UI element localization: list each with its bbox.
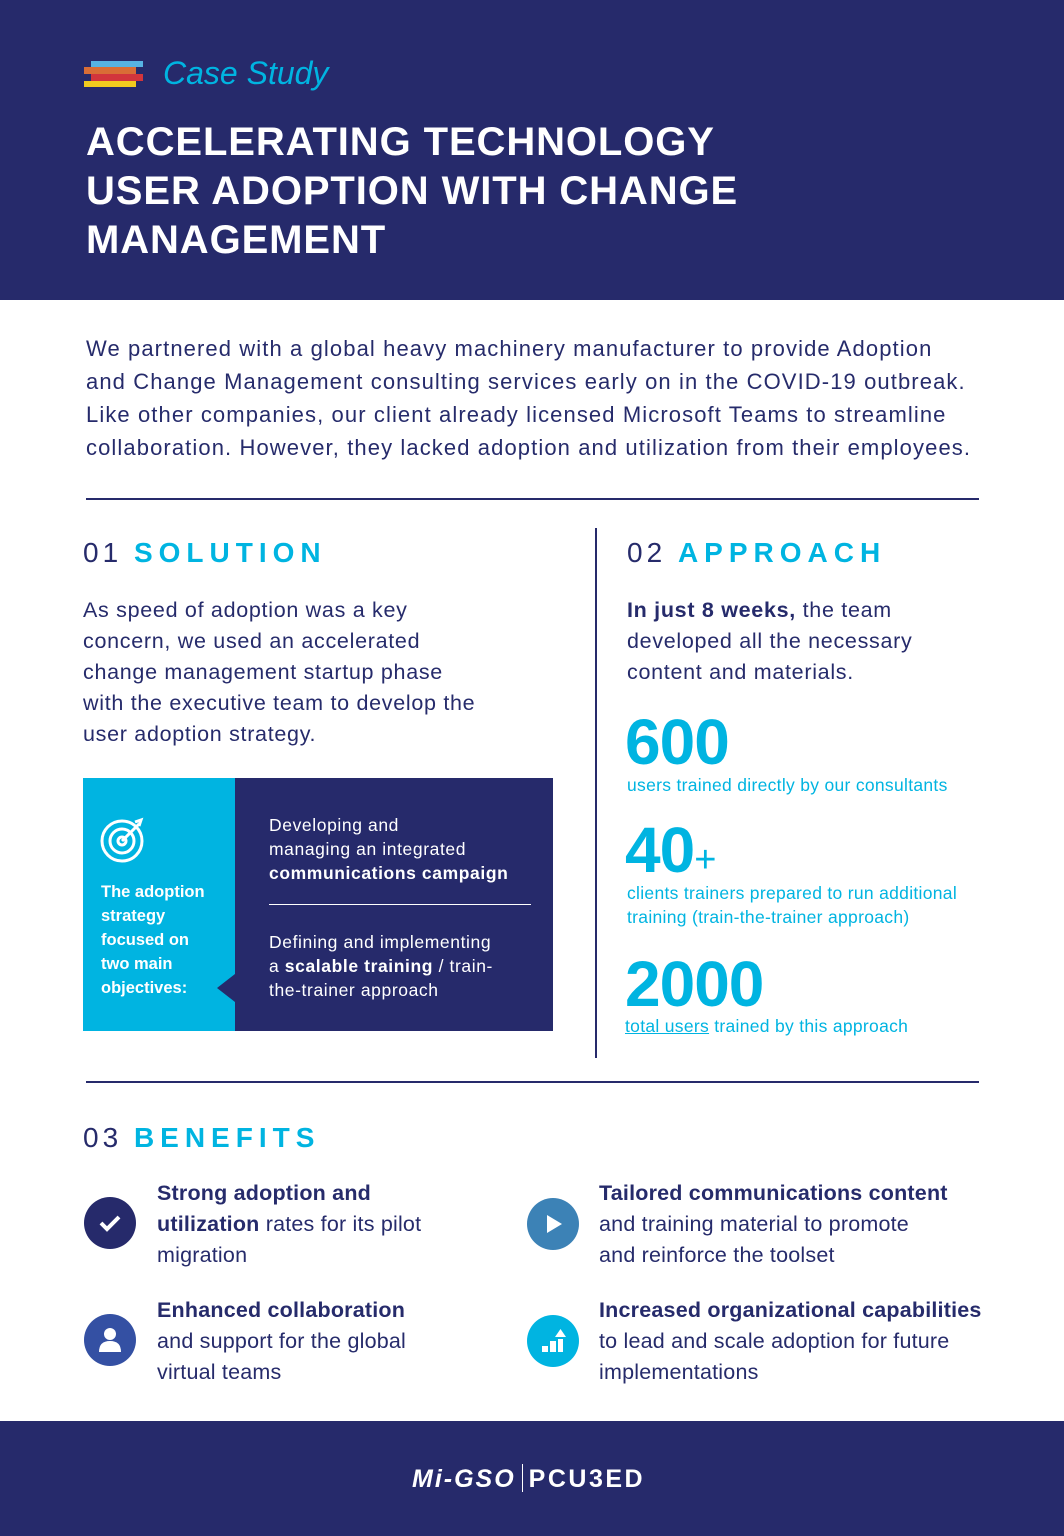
stat 40+: 40+ [625, 814, 715, 886]
intro text: and Change Management consulting services early on in the COVID-19 outbreak. [86, 369, 966, 394]
approach text: content and materials. [627, 660, 854, 684]
benefit: enhanced collaboration: and support for the global [157, 1329, 406, 1353]
intro text: collaboration. However, they lacked adoption and utilization from their employees. [86, 435, 971, 460]
benefit: strong adoption: utilization rates for its pilot [157, 1212, 421, 1236]
benefit: increased capabilities: to lead and scale adoption for future [599, 1329, 949, 1353]
benefit: tailored communications: and reinforce the toolset [599, 1243, 835, 1267]
navy panel: managing an integrated [269, 839, 466, 859]
stat 600 [625, 706, 948, 795]
benefit: enhanced collaboration: virtual teams [157, 1360, 281, 1384]
benefit: tailored communications [527, 1181, 948, 1267]
benefit: strong adoption: Strong adoption and [157, 1181, 371, 1205]
approach text: In just 8 weeks, the team [627, 598, 892, 622]
stat 2000: total users trained by this approach [625, 1016, 908, 1036]
heading: 02 approach: 02 APPROACH [627, 537, 886, 568]
benefit: increased capabilities: implementations [599, 1360, 759, 1384]
approach text: developed all the necessary [627, 629, 912, 653]
solution text: user adoption strategy. [83, 722, 316, 746]
title [86, 120, 738, 262]
benefit: enhanced collaboration [84, 1298, 406, 1384]
solution text: change management startup phase [83, 660, 443, 684]
heading: 01 solution: 01 SOLUTION [83, 537, 327, 568]
heading: 03 benefits: 03 BENEFITS [83, 1122, 320, 1153]
benefit: strong adoption: migration [157, 1243, 247, 1267]
navy panel: communications campaign [269, 863, 508, 883]
intro text: We partnered with a global heavy machinery manufacturer to provide Adoption [86, 336, 932, 361]
benefit: enhanced collaboration: Enhanced collaboration [157, 1298, 405, 1322]
solution text: As speed of adoption was a key [83, 598, 408, 622]
subtitle: case study: Case Study [163, 55, 328, 91]
intro text [86, 336, 971, 460]
cyan panel: The adoption [101, 883, 205, 901]
solution text [83, 598, 475, 746]
benefit: increased capabilities [527, 1298, 982, 1384]
title: MANAGEMENT [86, 218, 386, 262]
title: USER ADOPTION WITH CHANGE [86, 169, 738, 213]
stat 600: 600 [625, 706, 729, 778]
navy panel: a scalable training / train- [269, 956, 493, 976]
navy panel: Developing and [269, 815, 399, 835]
stat 2000: 2000 [625, 948, 763, 1020]
stat 40+: training (train-the-trainer approach) [627, 907, 909, 927]
icon: target [100, 818, 144, 862]
benefit: tailored communications: Tailored communications content [599, 1181, 948, 1205]
objectives box [83, 778, 553, 1031]
footer logo: Mi-GSO PCU3ED [412, 1465, 645, 1493]
benefit: strong adoption [84, 1181, 421, 1267]
benefit: increased capabilities: Increased organizational capabilities [599, 1298, 982, 1322]
cyan panel: focused on [101, 931, 189, 949]
solution text: with the executive team to develop the [83, 691, 475, 715]
stat 40+ [625, 814, 957, 927]
solution text: concern, we used an accelerated [83, 629, 420, 653]
navy panel: the-trainer approach [269, 980, 439, 1000]
stat 40+: clients trainers prepared to run additional [627, 883, 957, 903]
navy panel: Defining and implementing [269, 932, 491, 952]
navy panel [235, 778, 553, 1031]
cyan panel: objectives: [101, 979, 187, 997]
title: ACCELERATING TECHNOLOGY [86, 120, 715, 164]
cyan panel: two main [101, 955, 173, 973]
cyan panel: strategy [101, 907, 165, 925]
approach text [627, 598, 912, 684]
icon: stacked bars logo [84, 61, 143, 87]
stat 600: users trained directly by our consultants [627, 775, 948, 795]
footer [0, 1421, 1064, 1536]
benefit: tailored communications: and training material to promote [599, 1212, 909, 1236]
stat 2000 [625, 948, 908, 1036]
intro text: Like other companies, our client already licensed Microsoft Teams to streamline [86, 402, 947, 427]
header panel [0, 0, 1064, 300]
cyan panel [83, 778, 235, 1031]
